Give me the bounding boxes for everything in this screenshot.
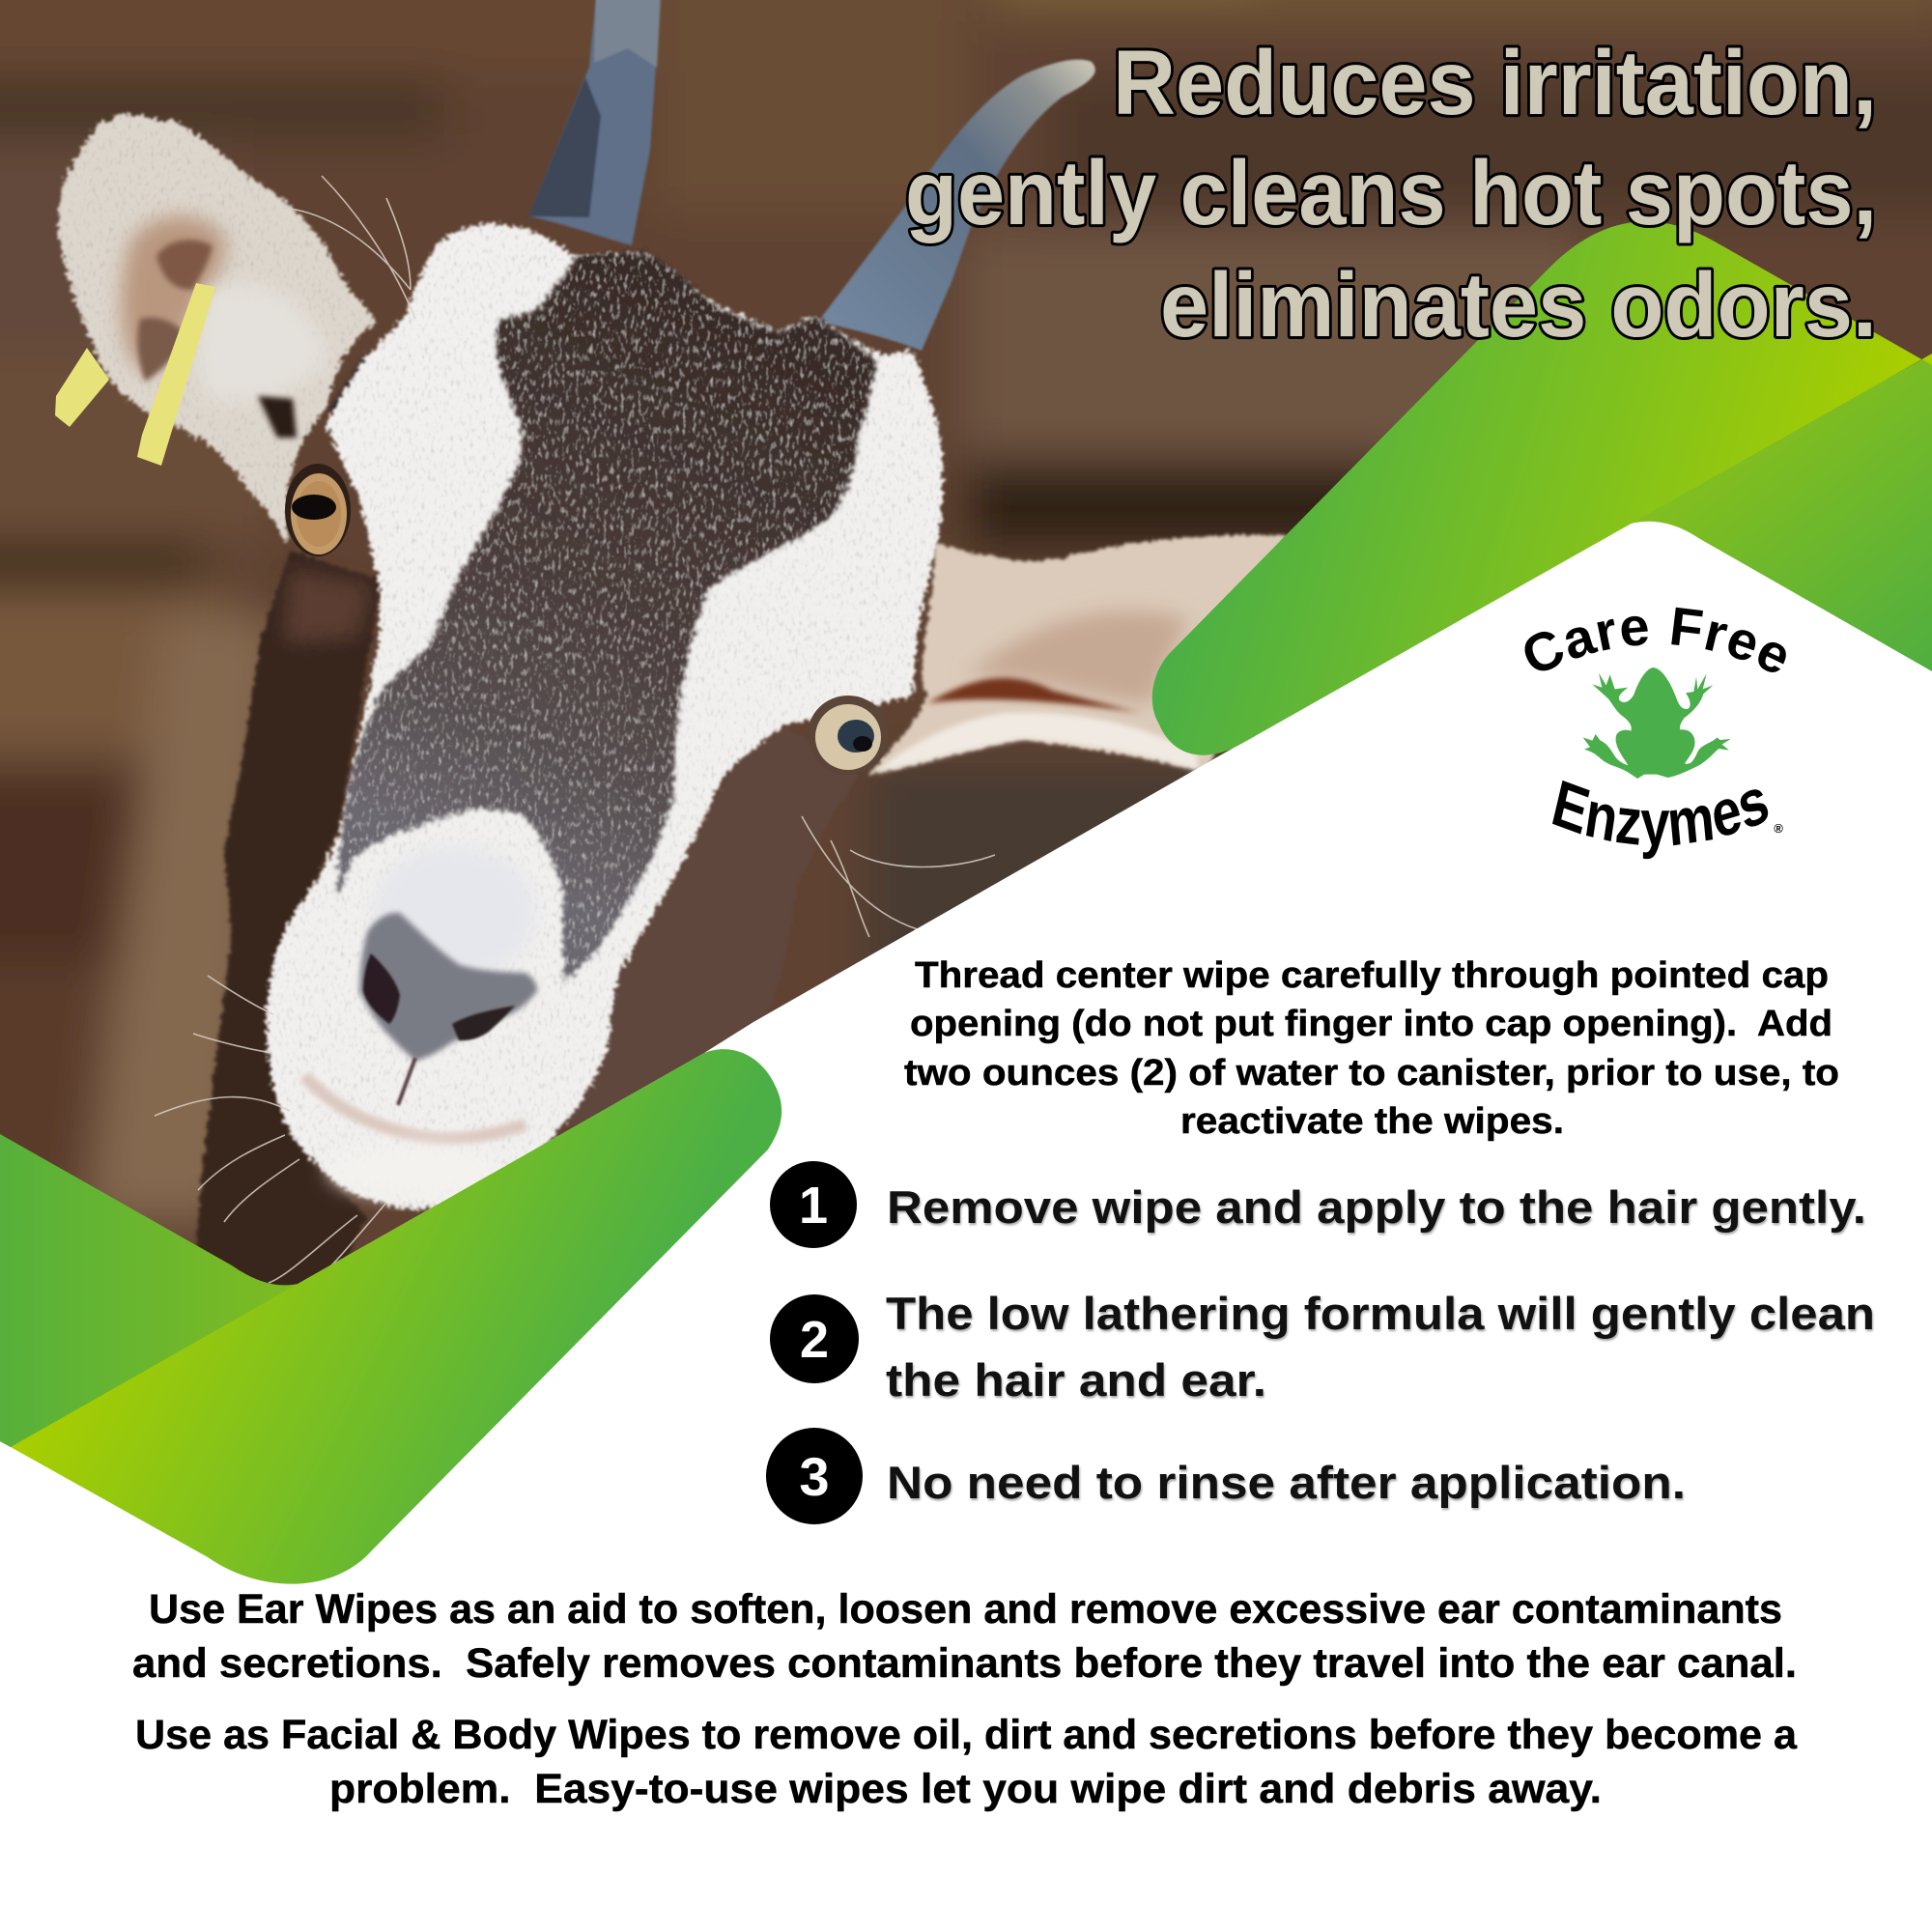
step 1 [770,1161,1866,1248]
left eye [285,464,351,556]
mouth line [304,1076,526,1139]
badge 1 [770,1161,857,1248]
step 2 [770,1288,1875,1406]
left nostril [363,953,400,1024]
whiskers [155,176,995,1283]
ear slit [927,678,1140,713]
left ear [58,113,386,544]
left horn [528,0,661,245]
icon: green frog [1583,668,1731,779]
photo background: blurred barn wood [0,0,1932,1517]
text block: facial and body wipes usage [135,1712,1798,1812]
badge 2: 2 [800,1311,829,1369]
muzzle highlight [372,845,536,980]
green ribbon: bottom left [11,1049,781,1584]
logo text: Care Free: Care Free [1524,607,1786,672]
badge 1: 1 [799,1177,828,1235]
neck: right brown side [563,725,860,1124]
text block: instructions intro: reactivate the wipes. [1180,1101,1564,1142]
title: headline [905,32,1877,356]
step 1 text: Remove wipe and apply to the hair gently. [887,1181,1866,1233]
title: headline: Reduces irritation, [1113,32,1877,134]
long tag [137,283,215,466]
ear inner shading [966,611,1188,705]
green band: bottom left panel [0,1134,319,1447]
philtrum [398,1058,415,1105]
dark hollow [258,396,297,438]
badge 2 [770,1294,859,1383]
goat face: white blaze [267,223,943,1209]
right horn [818,60,1095,351]
ear inner pink [122,216,227,371]
ear fold hair [197,284,328,402]
step 2 text: The low lathering formula will gently clean [886,1288,1875,1339]
logo text: Enzymes: Enzymes [1552,781,1768,860]
text block: instructions intro: Thread center wipe carefully through pointed cap [915,955,1829,996]
right ear [867,535,1285,775]
right eye [808,696,889,775]
green ribbon: top right [1152,221,1932,755]
panel: white content area [0,522,1932,1932]
right nostril [452,1006,515,1040]
text block: facial and body wipes usage: Use as Facial & Body Wipes to remove oil, dirt and secretions before they become a [135,1712,1798,1758]
text block: facial and body wipes usage: problem. Easy-to-use wipes let you wipe dirt and debris away. [329,1766,1602,1812]
dark band by ear [328,353,386,411]
text block: instructions intro [904,955,1839,1142]
short tag [55,348,109,427]
text block: instructions intro: two ounces (2) of water to canister, prior to use, to [904,1053,1839,1094]
ear tags [55,283,215,466]
ear inner dark [156,240,213,290]
goat muzzle [304,845,536,1196]
goat face: dark forehead patch [337,252,877,983]
title: headline: gently cleans hot spots, [905,142,1877,244]
text block: ear wipes usage: and secretions. Safely removes contaminants before they travel into the ear canal. [132,1640,1797,1687]
logo: Care Free Enzymes [1524,607,1786,860]
badge 3: 3 [799,1446,830,1507]
step 2 text [886,1288,1875,1406]
step 3 text: No need to rinse after application. [887,1457,1686,1508]
step 2 text: the hair and ear. [886,1354,1266,1406]
chin highlight [328,1146,502,1196]
ear lower band [874,713,1198,773]
title: headline: eliminates odors. [1160,254,1877,356]
panel: right green band behind white [1594,354,1932,676]
ear inner shadow [138,318,188,382]
text block: instructions intro: opening (do not put finger into cap opening). Add [910,1004,1833,1044]
badge 3 [766,1428,863,1524]
neck: left dark side [193,551,382,1294]
logo registered mark: ® [1774,821,1783,836]
step 3 [766,1428,1686,1524]
goat nose [359,913,537,1105]
text block: ear wipes usage: Use Ear Wipes as an aid to soften, loosen and remove excessive ear contaminants [149,1586,1782,1633]
photo: goat in a barn [0,0,1932,1517]
text block: ear wipes usage [132,1586,1797,1687]
